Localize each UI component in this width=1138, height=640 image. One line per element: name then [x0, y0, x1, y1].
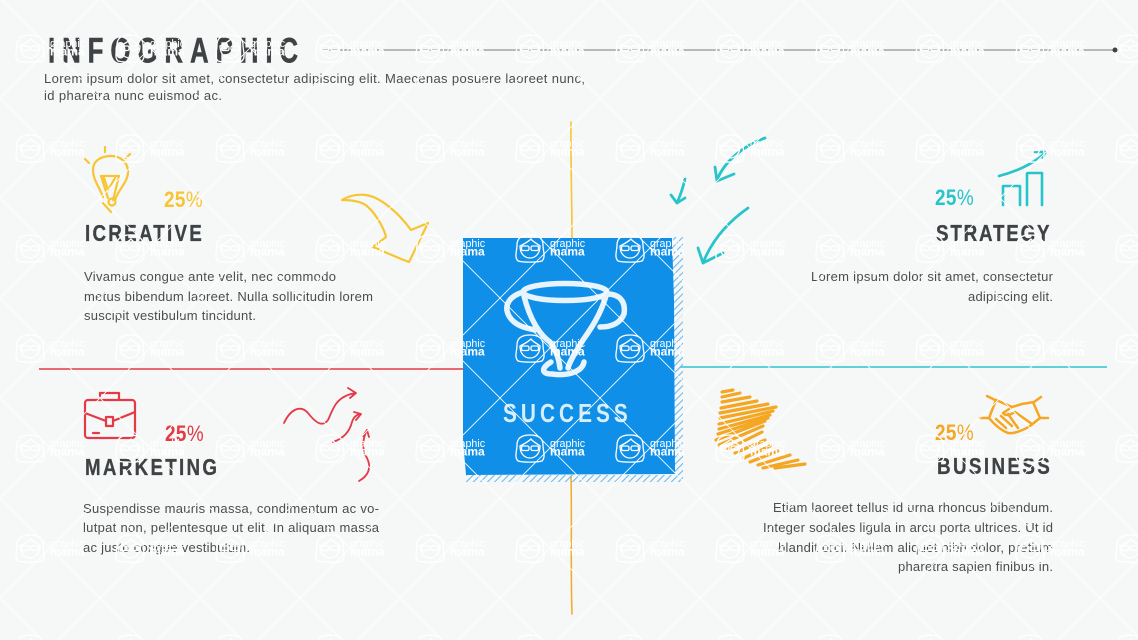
heading: STRATEGY: [936, 220, 1050, 247]
intro text: [44, 71, 585, 103]
label: success: SUCCESS: [503, 399, 628, 428]
body text: suscipit vestibulum tincidunt.: [84, 308, 256, 323]
icon: light bulb: [85, 147, 130, 212]
body text: lutpat non, pellentesque ut elit. In aliquam massa: [83, 520, 380, 535]
body text: Suspendisse mauris massa, condimentum ac vo-: [83, 501, 379, 516]
intro text: id pharetra nunc euismod ac.: [44, 88, 222, 103]
icon: handshake: [980, 396, 1048, 433]
vertical yellow axis: [571, 122, 572, 614]
timeline end dot: [1112, 48, 1118, 52]
section: strategy: [811, 152, 1054, 304]
icon: trophy: [507, 284, 624, 375]
heading: BUSINESS: [937, 453, 1050, 480]
section: business: [763, 396, 1053, 574]
body text: Lorem ipsum dolor sit amet, consectetur: [811, 269, 1054, 284]
section: creative: [84, 147, 373, 323]
icon: rising chart: [999, 152, 1045, 205]
stat: 25 percent: 25%: [164, 188, 203, 212]
horizontal teal axis: [680, 366, 1107, 368]
stat: 25 percent: 25%: [165, 422, 204, 446]
stat: 25 percent: 25%: [935, 421, 974, 445]
section: marketing: [83, 393, 380, 555]
hatched shadow: [466, 237, 683, 482]
heading: ICREATIVE: [85, 220, 202, 247]
horizontal red axis: [39, 368, 464, 370]
body text: Etiam laoreet tellus id urna rhoncus bibendum.: [773, 500, 1053, 515]
body text: metus bibendum laoreet. Nulla sollicitudin lorem: [84, 289, 373, 304]
heading: MARKETING: [85, 454, 217, 481]
body text: [84, 269, 373, 323]
stat: 25 percent: 25%: [935, 186, 974, 210]
panel: success: [463, 237, 683, 482]
scribbled arrow: orange: [716, 390, 805, 468]
body text: Integer sodales ligula in arcu porta ultrices. Ut id: [763, 520, 1053, 535]
body text: adipiscing elit.: [968, 289, 1053, 304]
body text: ac justo congue vestibulum.: [83, 540, 250, 555]
body text: Vivamus congue ante velit, nec commodo: [84, 269, 336, 284]
body text: pharetra sapien finibus in.: [898, 559, 1053, 574]
icon: briefcase: [85, 393, 135, 438]
body text: blandit orci. Nullam aliquet nibh dolor, pretium: [778, 540, 1053, 555]
intro text: Lorem ipsum dolor sit amet, consectetur adipiscing elit. Maecenas posuere laoreet nunc,: [44, 71, 585, 86]
title timeline rule: [322, 49, 1115, 51]
arrows: red squiggles: [284, 388, 369, 481]
body text: [763, 500, 1053, 574]
arrow: yellow outline: [342, 195, 428, 262]
blue square: [463, 238, 675, 475]
title: INFOGRAPHIC: [48, 31, 298, 70]
body text: [83, 501, 380, 555]
arrows: teal group: [671, 138, 765, 263]
body text: [811, 269, 1054, 304]
